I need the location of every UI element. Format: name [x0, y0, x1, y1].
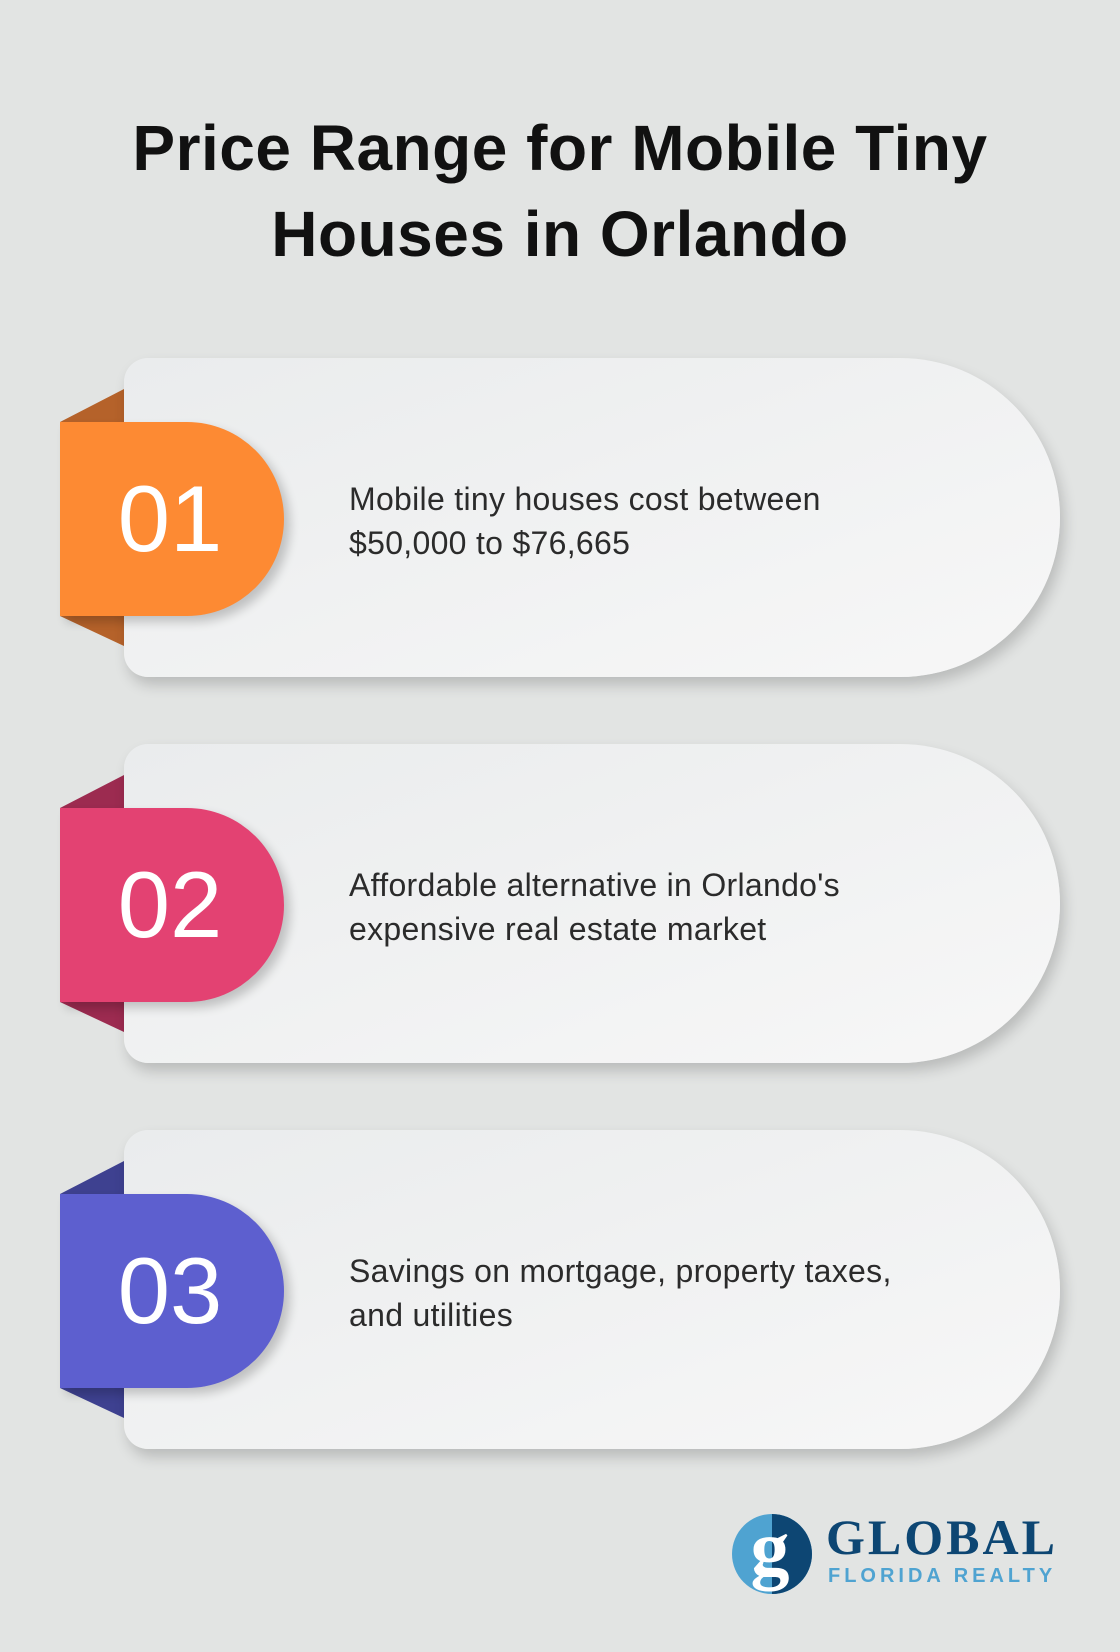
card	[124, 744, 1060, 1063]
text block	[349, 1253, 892, 1333]
panel: item 02	[60, 744, 1070, 1077]
text block: and utilities	[349, 1297, 513, 1333]
icon: g circle	[732, 1512, 812, 1594]
text block: Affordable alternative in Orlando's	[349, 867, 840, 903]
card	[124, 358, 1060, 677]
number badge 01	[60, 422, 284, 616]
fold shading	[60, 389, 124, 646]
title: Price Range for Mobile Tiny	[132, 112, 988, 184]
logo text: GLOBAL	[826, 1509, 1058, 1565]
panel: item 03	[60, 1130, 1070, 1463]
number badge 01: 01	[118, 466, 222, 571]
text block: expensive real estate market	[349, 911, 766, 947]
panel: item 01	[60, 358, 1070, 691]
text block	[349, 867, 840, 947]
number badge 03	[60, 1194, 284, 1388]
card	[124, 1130, 1060, 1449]
text block: Mobile tiny houses cost between	[349, 481, 821, 517]
text block	[349, 481, 821, 561]
fold shading	[60, 775, 124, 1032]
text block: Savings on mortgage, property taxes,	[349, 1253, 892, 1289]
logo: FLORIDA REALTY	[828, 1565, 1056, 1587]
number badge 03: 03	[118, 1238, 222, 1343]
number badge 02	[60, 808, 284, 1002]
fold shading	[60, 1161, 124, 1418]
text block: $50,000 to $76,665	[349, 525, 630, 561]
title	[132, 112, 988, 270]
logo	[732, 1509, 1058, 1594]
title: Houses in Orlando	[271, 198, 849, 270]
number badge 02: 02	[118, 852, 222, 957]
